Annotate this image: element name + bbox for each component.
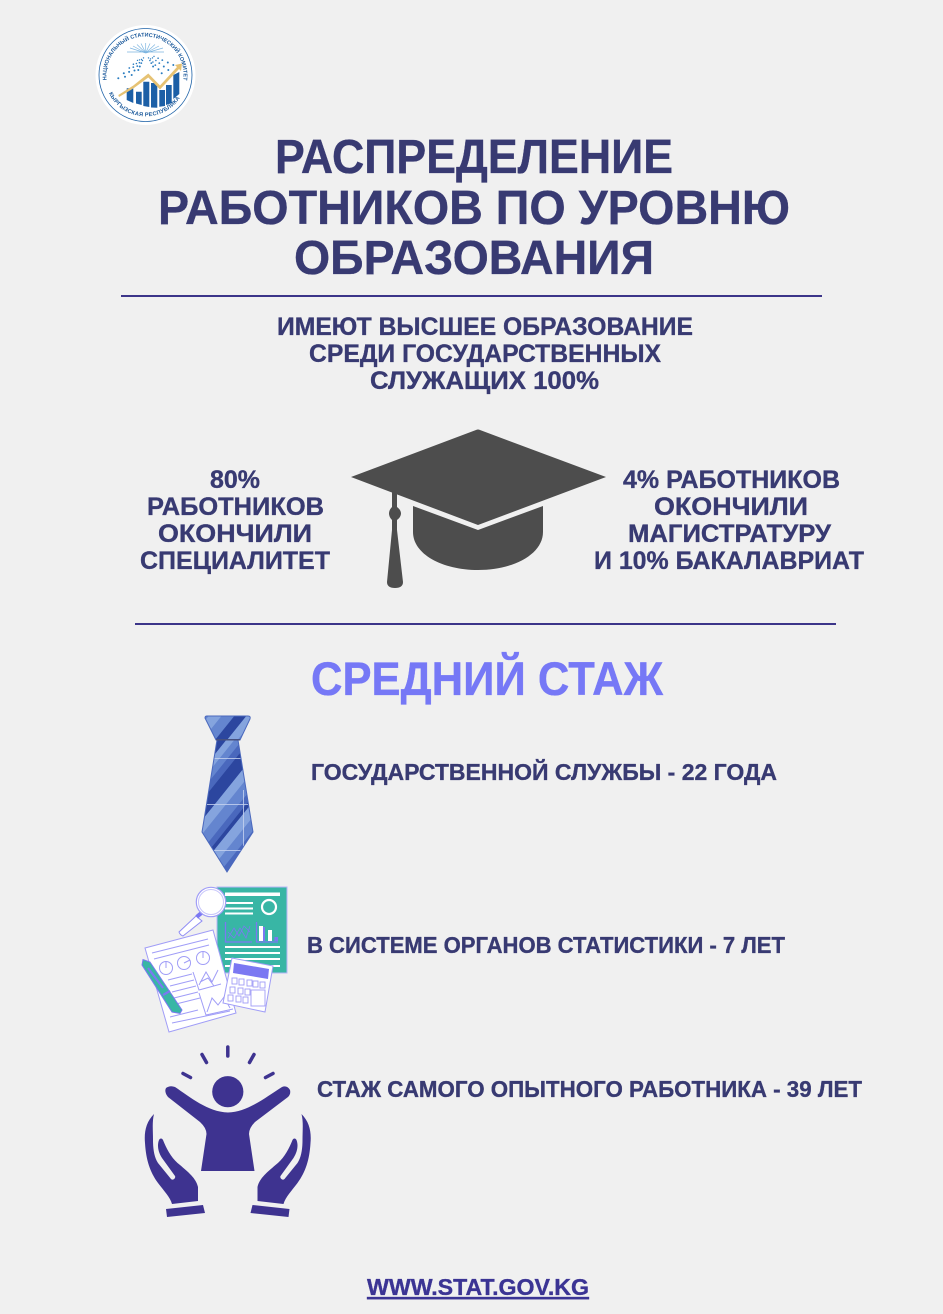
- text: 80% specialist: ОКОНЧИЛИ: [158, 520, 312, 548]
- logo: [96, 25, 196, 125]
- subtitle: higher education: СРЕДИ ГОСУДАРСТВЕННЫХ: [309, 340, 661, 368]
- title: [158, 131, 790, 285]
- title: РАБОТНИКОВ ПО УРОВНЮ: [158, 182, 790, 235]
- text: master and bachelor: И 10% БАКАЛАВРИАТ: [594, 547, 864, 575]
- text: 80% specialist: СПЕЦИАЛИТЕТ: [140, 547, 330, 575]
- subtitle: higher education: СЛУЖАЩИХ 100%: [370, 367, 599, 395]
- logo: КЫРГЫЗСКАЯ РЕСПУБЛИКА: [109, 92, 180, 116]
- heading: average tenure: СРЕДНИЙ СТАЖ: [311, 652, 663, 705]
- text: 80% specialist: 80%: [210, 466, 260, 494]
- text: 80% specialist: РАБОТНИКОВ: [147, 493, 324, 521]
- text: 80% specialist: [140, 466, 330, 575]
- text: master and bachelor: ОКОНЧИЛИ: [654, 493, 808, 521]
- footer link: WWW.STAT.GOV.KG: [367, 1274, 589, 1300]
- icon: documents and calculator: [142, 887, 287, 1032]
- text: master and bachelor: МАГИСТРАТУРУ: [628, 520, 831, 548]
- logo: НАЦИОНАЛЬНЫЙ СТАТИСТИЧЕСКИЙ КОМИТЕТ: [102, 32, 188, 81]
- text: public service tenure: ГОСУДАРСТВЕННОЙ СЛУЖБЫ - 22 ГОДА: [311, 758, 777, 785]
- subtitle: higher education: [277, 313, 693, 395]
- icon: person supported by hands: [145, 1047, 311, 1217]
- text: most experienced employee: СТАЖ САМОГО ОПЫТНОГО РАБОТНИКА - 39 ЛЕТ: [317, 1076, 862, 1102]
- icon: necktie: [202, 716, 254, 873]
- text: master and bachelor: 4% РАБОТНИКОВ: [623, 466, 840, 494]
- subtitle: higher education: ИМЕЮТ ВЫСШЕЕ ОБРАЗОВАНИЕ: [277, 313, 693, 341]
- text: master and bachelor: [594, 466, 864, 575]
- text: statistics agencies tenure: В СИСТЕМЕ ОРГАНОВ СТАТИСТИКИ - 7 ЛЕТ: [307, 932, 785, 958]
- icon: graduation cap: [351, 430, 606, 588]
- title: РАСПРЕДЕЛЕНИЕ: [275, 131, 673, 184]
- title: ОБРАЗОВАНИЯ: [294, 232, 654, 285]
